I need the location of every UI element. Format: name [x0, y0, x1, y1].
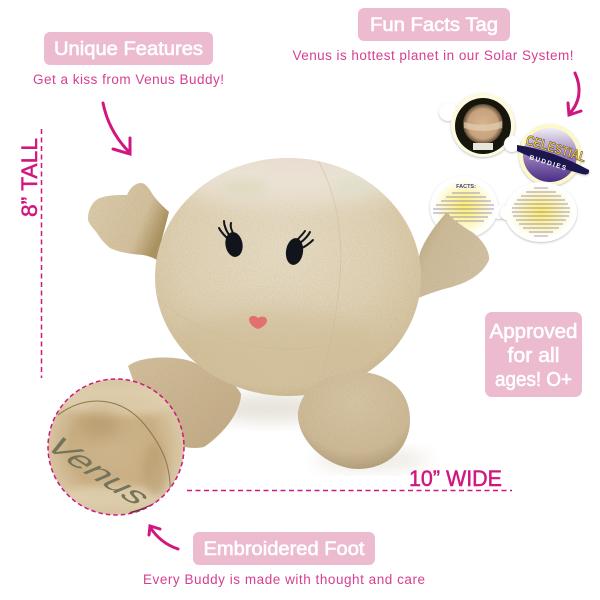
tag: facts panel: FACTS:: [456, 184, 476, 190]
pink top tint: [270, 158, 330, 172]
arrow: Unique Features: [103, 103, 130, 154]
heading: Unique Features: [44, 32, 213, 65]
label: 8 inch tall: 8” TALL: [17, 138, 42, 217]
mouth: pink heart kiss: [249, 316, 267, 329]
body top highlight: [188, 158, 391, 212]
heading: Embroidered Foot: [193, 532, 375, 565]
width dashed line: [187, 490, 512, 492]
ground shadow: right foot: [314, 450, 430, 470]
height dashed line: [40, 129, 42, 378]
heading: Unique Features: Unique Features: [54, 39, 203, 60]
text: Unique Features caption: Get a kiss from Venus Buddy!: [33, 72, 224, 87]
badge: approved for all ages: Approved: [490, 321, 578, 343]
embroidered word Venus: Venus: [35, 435, 161, 508]
badge: approved for all ages: ages! O+: [495, 369, 572, 391]
greenish patches: [228, 180, 264, 193]
tag: story panel: [500, 182, 577, 242]
text: Fun Facts caption: Venus is hottest planet in our Solar System!: [292, 48, 574, 63]
heading: Fun Facts Tag: Fun Facts Tag: [370, 15, 498, 36]
left leg: [128, 357, 241, 448]
plush Venus toy: [88, 145, 489, 470]
text: Embroidered Foot caption: Every Buddy is made with thought and care: [143, 572, 425, 587]
badge: approved for all ages: for all: [508, 345, 560, 367]
heading: Embroidered Foot: Embroidered Foot: [204, 539, 365, 560]
tag: Celestial Buddies logo: BUDDIES: [528, 154, 567, 172]
label: 10 inch wide: 10” WIDE: [409, 466, 502, 491]
tag: Celestial Buddies logo: [504, 124, 589, 186]
heading: Fun Facts Tag: [358, 8, 510, 41]
fun facts hang tags: [430, 93, 589, 242]
left arm: [88, 183, 169, 260]
badge: approved for all ages: [485, 312, 582, 397]
arrow: embroidered foot: [149, 526, 178, 549]
left eye with lashes: [219, 221, 245, 258]
body lower shading: [170, 311, 380, 379]
right arm: [418, 212, 489, 298]
embroidered foot close-up: [35, 379, 184, 515]
tag: planet medallion: [439, 93, 515, 157]
tag: facts panel: [430, 176, 506, 238]
ground shadow: body: [210, 394, 330, 422]
right eye with lashes: [284, 231, 313, 266]
body seams: [174, 161, 342, 321]
arrow: Fun Facts Tag: [568, 73, 581, 115]
body: [155, 158, 421, 396]
right foot: [298, 372, 410, 469]
